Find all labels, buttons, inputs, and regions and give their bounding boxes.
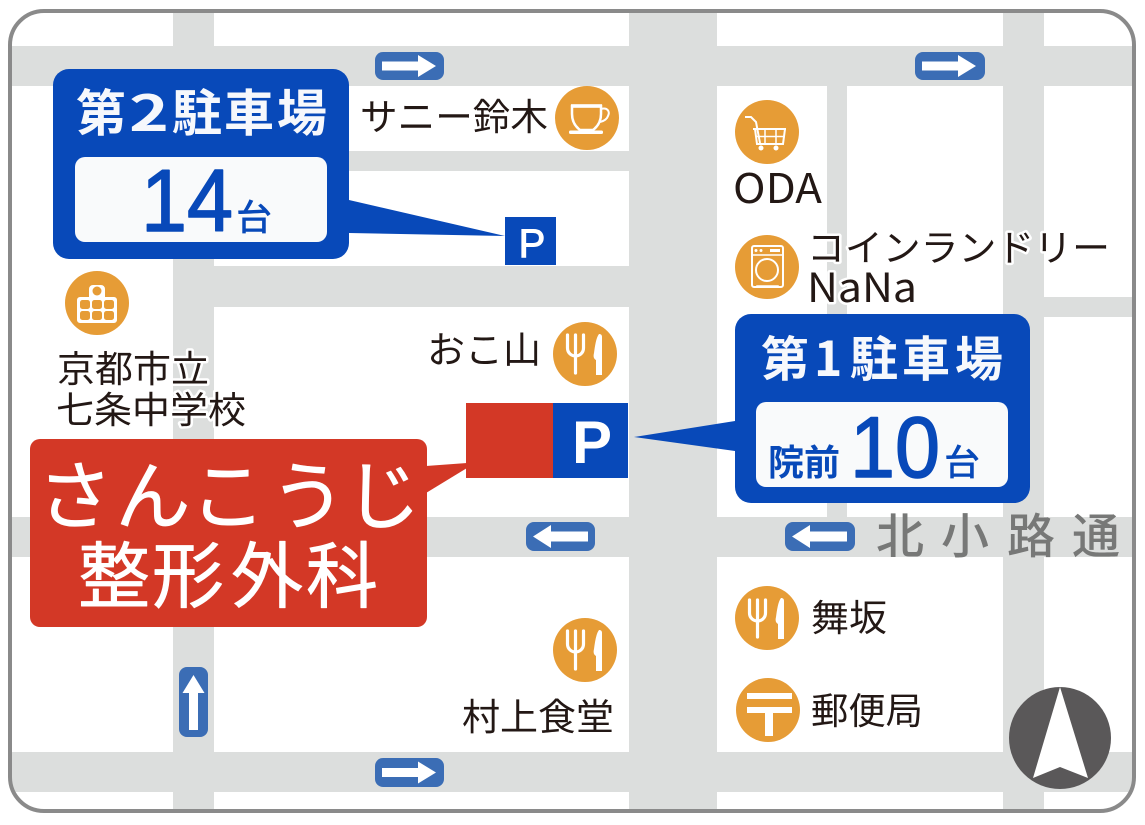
clinic name line 1: さんこうじ xyxy=(37,436,421,545)
parking 1 marker: P xyxy=(572,409,612,476)
label: Maisaka: 舞坂 xyxy=(811,588,887,642)
icon: shopping cart xyxy=(735,100,799,164)
parking 2 heading: 第 xyxy=(76,74,126,146)
clinic name line 2: 整形外科 xyxy=(78,518,378,623)
compass xyxy=(1009,687,1111,789)
parking 2 heading xyxy=(76,74,327,146)
arrow: one-way east, top left xyxy=(375,52,444,80)
label: school name: 京都市立 xyxy=(57,339,209,393)
label: post office: 郵便局 xyxy=(811,681,923,735)
icon: cafe xyxy=(555,86,619,150)
parking 1 heading: 第1駐車場 xyxy=(761,320,1003,390)
label: Murakami Shokudo: 村上食堂 xyxy=(462,687,614,741)
label: school name xyxy=(56,339,246,434)
label: school name: 七条中学校 xyxy=(56,380,246,434)
parking 2 capacity: 台 xyxy=(236,189,272,241)
parking 1 capacity xyxy=(768,400,980,496)
label: Sunny Suzuki: サニー鈴木 xyxy=(360,87,548,141)
parking 2 marker: P xyxy=(519,222,545,266)
label: Okoyama: おこ山 xyxy=(427,320,541,374)
icon: restaurant, Murakami xyxy=(553,618,617,682)
icon: restaurant, Okoyama xyxy=(553,322,617,386)
parking 1 capacity: 10 xyxy=(850,400,940,496)
callout: parking 2 xyxy=(53,69,505,259)
icon: restaurant, Maisaka xyxy=(735,586,799,650)
label: ODA: ODA xyxy=(733,155,822,215)
clinic building marker xyxy=(466,403,553,478)
parking 2 capacity: 14 xyxy=(141,151,233,250)
label: coin laundry NaNa: NaNa xyxy=(807,256,917,314)
callout: parking 1 xyxy=(634,314,1030,503)
parking 1 capacity: 院前 xyxy=(768,434,840,486)
arrow: one-way east, top right xyxy=(915,52,985,80)
parking 2 marker xyxy=(505,217,556,266)
arrow: one-way west, right xyxy=(785,522,855,551)
callout: clinic name xyxy=(30,436,467,627)
icon: post office xyxy=(736,678,800,742)
icon: school xyxy=(65,271,129,335)
label: coin laundry NaNa xyxy=(807,218,1110,314)
label: coin laundry NaNa: コインランドリー xyxy=(807,218,1110,272)
arrow: one-way west, centre xyxy=(526,522,595,551)
parking 1 marker xyxy=(553,403,628,478)
arrow: one-way north xyxy=(179,667,208,737)
parking 2 heading: 駐車場 xyxy=(172,74,327,146)
parking 2 heading: 2 xyxy=(129,74,169,146)
icon: washing machine xyxy=(735,235,799,299)
parking 1 capacity: 台 xyxy=(944,434,980,486)
road name: 北小路通 xyxy=(876,497,1120,567)
arrow: one-way east, bottom xyxy=(375,758,444,787)
